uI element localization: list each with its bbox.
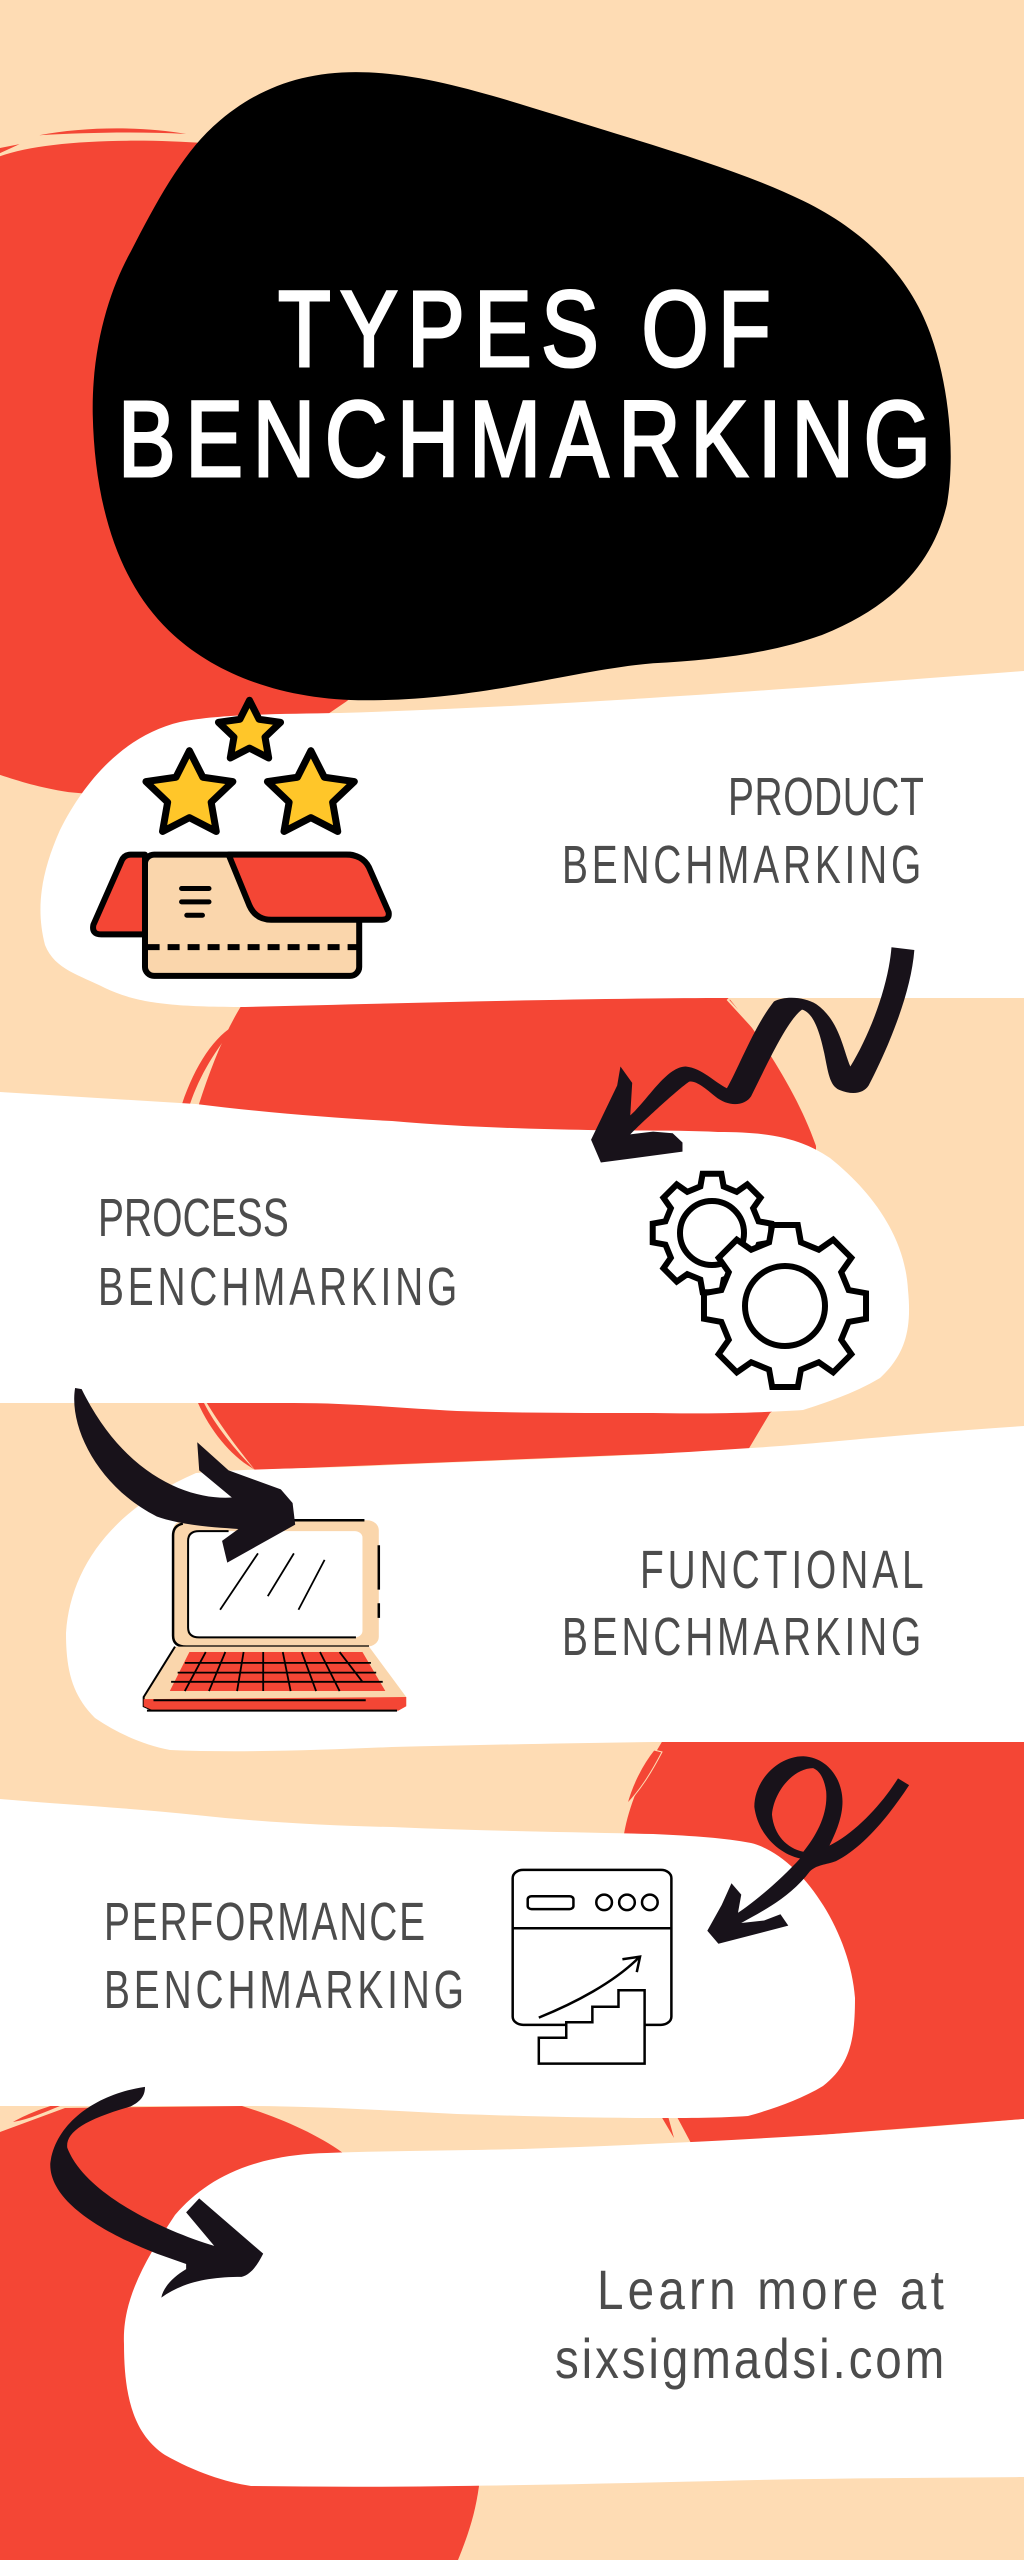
line two: sixsigmadsi.com <box>555 2328 944 2391</box>
laptop screen <box>188 1531 362 1637</box>
red brush circle: bottom left <box>0 2104 479 2560</box>
line two: BENCHMARKING <box>562 1606 921 1666</box>
arrow: performance to footer <box>50 2087 263 2298</box>
line two: BENCHMARKING <box>104 1959 464 2019</box>
line two: BENCHMARKING <box>98 1256 457 1316</box>
text: process benchmarking <box>98 1187 457 1316</box>
arrow: product to process <box>591 947 914 1163</box>
line one: PROCESS <box>98 1187 289 1247</box>
icon: gears <box>653 1174 866 1387</box>
text: functional benchmarking <box>562 1539 924 1666</box>
base line <box>147 1700 397 1711</box>
keyboard <box>170 1652 385 1691</box>
red brush circle: centre <box>182 995 816 1470</box>
box dashed seam <box>148 944 358 950</box>
icon: three stars above open box <box>93 700 389 976</box>
box body <box>145 855 359 976</box>
text: learn more <box>555 2259 944 2391</box>
line one: PERFORMANCE <box>104 1891 425 1951</box>
laptop base red edge <box>144 1697 406 1711</box>
white band: functional <box>66 1426 1024 1751</box>
icon: laptop <box>144 1520 406 1711</box>
window outline <box>513 1870 671 2025</box>
white band: footer <box>124 2119 1024 2487</box>
laptop screen frame <box>173 1520 379 1647</box>
title line two: BENCHMARKING <box>118 378 931 499</box>
box label lines <box>182 888 209 915</box>
window buttons <box>596 1895 658 1910</box>
box flap: left <box>93 855 145 934</box>
text: performance benchmarking <box>104 1891 464 2019</box>
title blob <box>93 72 951 700</box>
box flap: right <box>229 855 389 920</box>
red brush circle: top left <box>0 128 379 804</box>
title line one: TYPES OF <box>278 268 771 389</box>
laptop frame outline <box>173 1520 379 1647</box>
small gear <box>653 1174 771 1292</box>
laptop base <box>144 1647 406 1711</box>
screen glare lines <box>220 1553 325 1610</box>
large gear <box>704 1225 866 1387</box>
icon: performance dashboard with stairs <box>513 1870 671 2064</box>
window header line <box>513 1927 671 1929</box>
arrow: process to laptop <box>74 1388 295 1563</box>
line two: BENCHMARKING <box>562 834 921 894</box>
growth arrow <box>539 1957 640 2018</box>
window search bar <box>528 1896 573 1909</box>
title <box>118 268 931 499</box>
arrow: loop to performance <box>707 1756 909 1944</box>
line one: PRODUCT <box>728 766 924 826</box>
line one: FUNCTIONAL <box>640 1539 924 1599</box>
star: left <box>146 751 233 831</box>
stairs <box>539 1990 645 2064</box>
line one: Learn more at <box>597 2259 944 2322</box>
star: top <box>218 700 281 758</box>
white band: product <box>40 671 1024 1007</box>
star: right <box>267 751 354 831</box>
keyboard grid <box>171 1652 383 1691</box>
text: product benchmarking <box>562 766 924 894</box>
red brush circle: right <box>624 1740 1024 2145</box>
screen outline <box>188 1531 356 1637</box>
white band: performance <box>0 1799 855 2118</box>
white band: process <box>0 1092 909 1413</box>
laptop base left edge <box>144 1647 175 1711</box>
